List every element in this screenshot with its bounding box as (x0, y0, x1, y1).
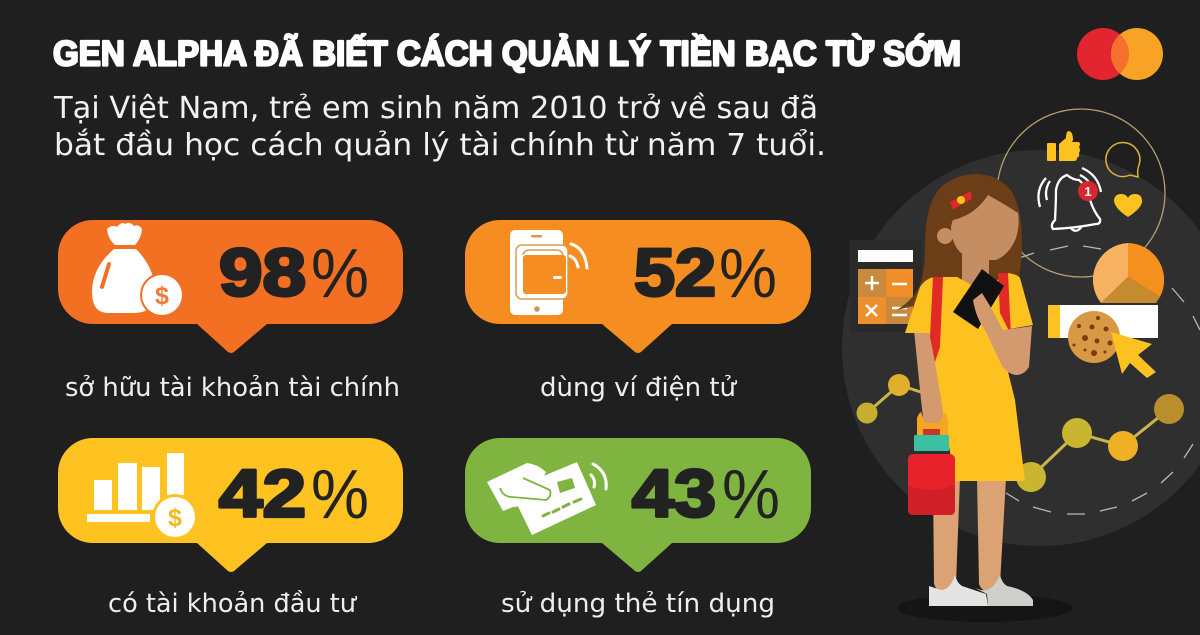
shoes (929, 575, 1033, 606)
title: GEN ALPHA ĐÃ BIẾT CÁCH QUẢN LÝ TIỀN BẠC TỪ SỚM (53, 34, 961, 74)
pie chart (1093, 243, 1164, 303)
neck and face (937, 195, 1019, 290)
icon: bars and coin (87, 453, 198, 540)
shadow under feet (897, 594, 1073, 622)
speech bubble (58, 438, 403, 572)
icon: bars and coin: $ (168, 504, 182, 532)
value 43%: % (722, 455, 780, 533)
dashed orbit (1006, 246, 1200, 514)
value 42% (219, 455, 369, 533)
icon: phone wallet (510, 230, 587, 315)
right arm and hand (973, 293, 1032, 375)
thin circle outline (997, 109, 1165, 277)
bar with cookie and cursor (1048, 305, 1158, 378)
icon: notification bell (1038, 168, 1101, 231)
value 98%: 98 (219, 236, 306, 310)
line chart dots (856, 374, 1184, 492)
value 98%: % (311, 234, 369, 312)
icon: money bag (92, 223, 184, 317)
icon: cursor (1111, 332, 1156, 378)
background circle (842, 150, 1200, 546)
value 52% (634, 234, 777, 312)
panel: 98% financial account (58, 220, 403, 353)
icon: hand with card (487, 462, 606, 535)
panel: 52% e-wallet (465, 220, 811, 353)
icon: money bag: $ (155, 282, 169, 310)
icon: thumbs up (1047, 131, 1080, 161)
legs (933, 478, 1006, 592)
value 43%: 43 (632, 456, 716, 532)
hair bow (950, 191, 972, 210)
value 43% (632, 455, 780, 533)
label: financial account: sở hữu tài khoản tài chính (65, 373, 400, 403)
yellow dress (905, 273, 1033, 481)
icon: heart (1114, 194, 1142, 217)
label: investment account: có tài khoản đầu tư (108, 589, 358, 619)
value 42%: % (311, 455, 369, 533)
icon: speech bubble outline (1106, 143, 1140, 177)
hair (897, 174, 1022, 310)
subtitle text: bắt đầu học cách quản lý tài chính từ năm 7 tuổi. (54, 127, 826, 163)
illustration: girl with digital finance icons (842, 109, 1200, 622)
left arm (914, 330, 947, 425)
handbag (908, 412, 955, 515)
value 52%: 52 (634, 236, 716, 310)
label: e-wallet: dùng ví điện tử (540, 373, 738, 403)
speech bubble (465, 438, 811, 572)
value 98% (219, 234, 369, 312)
value 52%: % (719, 234, 777, 312)
icon: calculator (850, 240, 922, 332)
icon: Mastercard logo (1077, 28, 1163, 80)
icon: cookie (1068, 311, 1120, 363)
phone (953, 269, 1004, 329)
icon: notification bell: 1 (1084, 184, 1092, 199)
girl figure (897, 174, 1033, 606)
panel: 42% investment account (58, 438, 403, 572)
speech bubble (465, 220, 811, 353)
backpack straps (930, 273, 1011, 362)
label: credit card: sử dụng thẻ tín dụng (501, 589, 775, 619)
panel: 43% credit card (465, 438, 811, 572)
subtitle text (53, 91, 826, 163)
value 42%: 42 (219, 456, 306, 532)
speech bubble (58, 220, 403, 353)
subtitle text: Tại Việt Nam, trẻ em sinh năm 2010 trở về sau đã (53, 91, 818, 126)
